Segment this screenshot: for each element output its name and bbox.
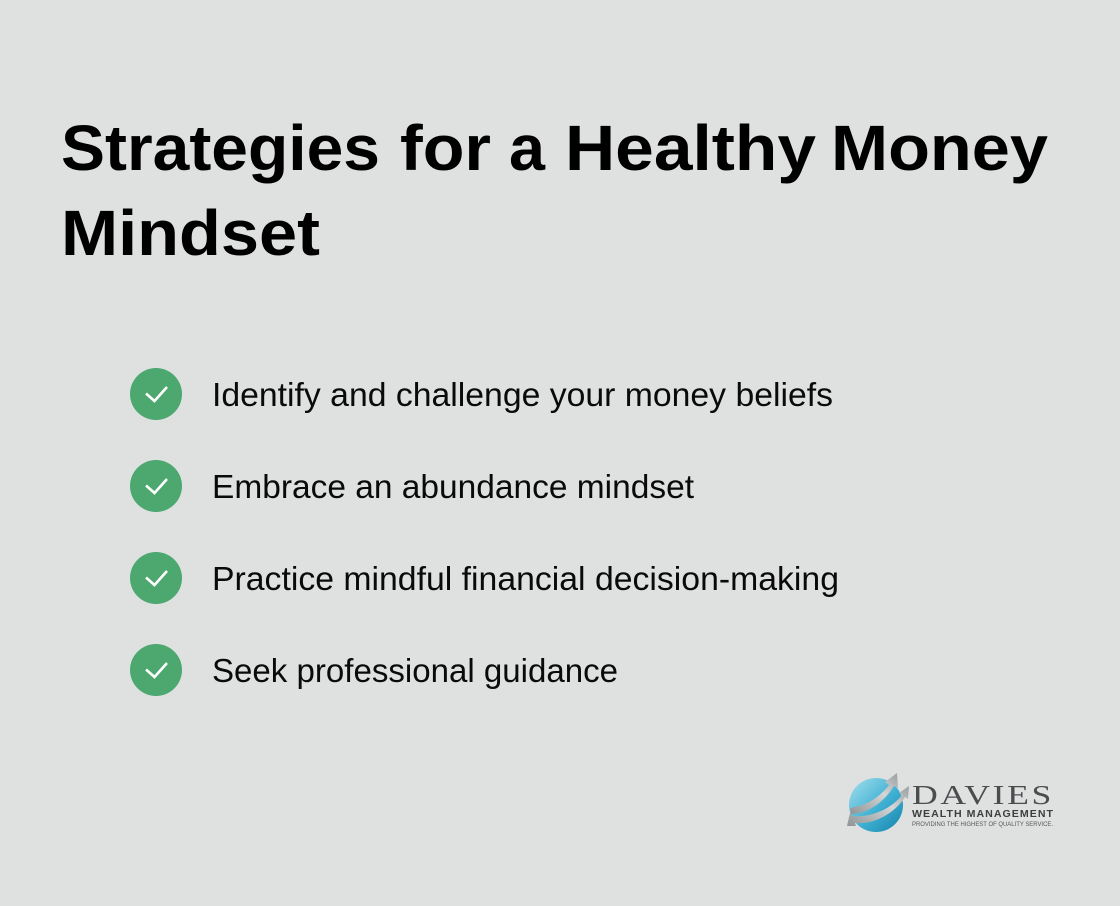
list item: professional guidance [130,644,618,696]
logo wordmark: DAVIES [912,780,1054,810]
title: Strategies [61,112,380,184]
title: a [509,112,545,184]
title: for [400,112,491,184]
logo: Davies Wealth Management [847,773,1054,832]
title: Money [831,112,1048,184]
title: Healthy [565,112,816,184]
checklist [130,368,839,696]
title [61,112,1048,269]
logo tagline: PROVIDING THE HIGHEST OF QUALITY SERVICE. [912,821,1053,828]
list item: mindful decisions [130,552,839,604]
list item: mindful decisions: Practice mindful financial decision-making [212,560,839,597]
title: Mindset [61,197,320,269]
list item: identify beliefs: Identify and challenge your money beliefs [212,376,833,413]
list item: identify beliefs [130,368,833,420]
logo subtitle: WEALTH MANAGEMENT [912,808,1054,820]
list item: abundance mindset [130,460,694,512]
list item: abundance mindset: Embrace an abundance mindset [212,468,694,505]
icon: globe with arrows [847,773,909,832]
list item: professional guidance: Seek professional guidance [212,652,618,689]
